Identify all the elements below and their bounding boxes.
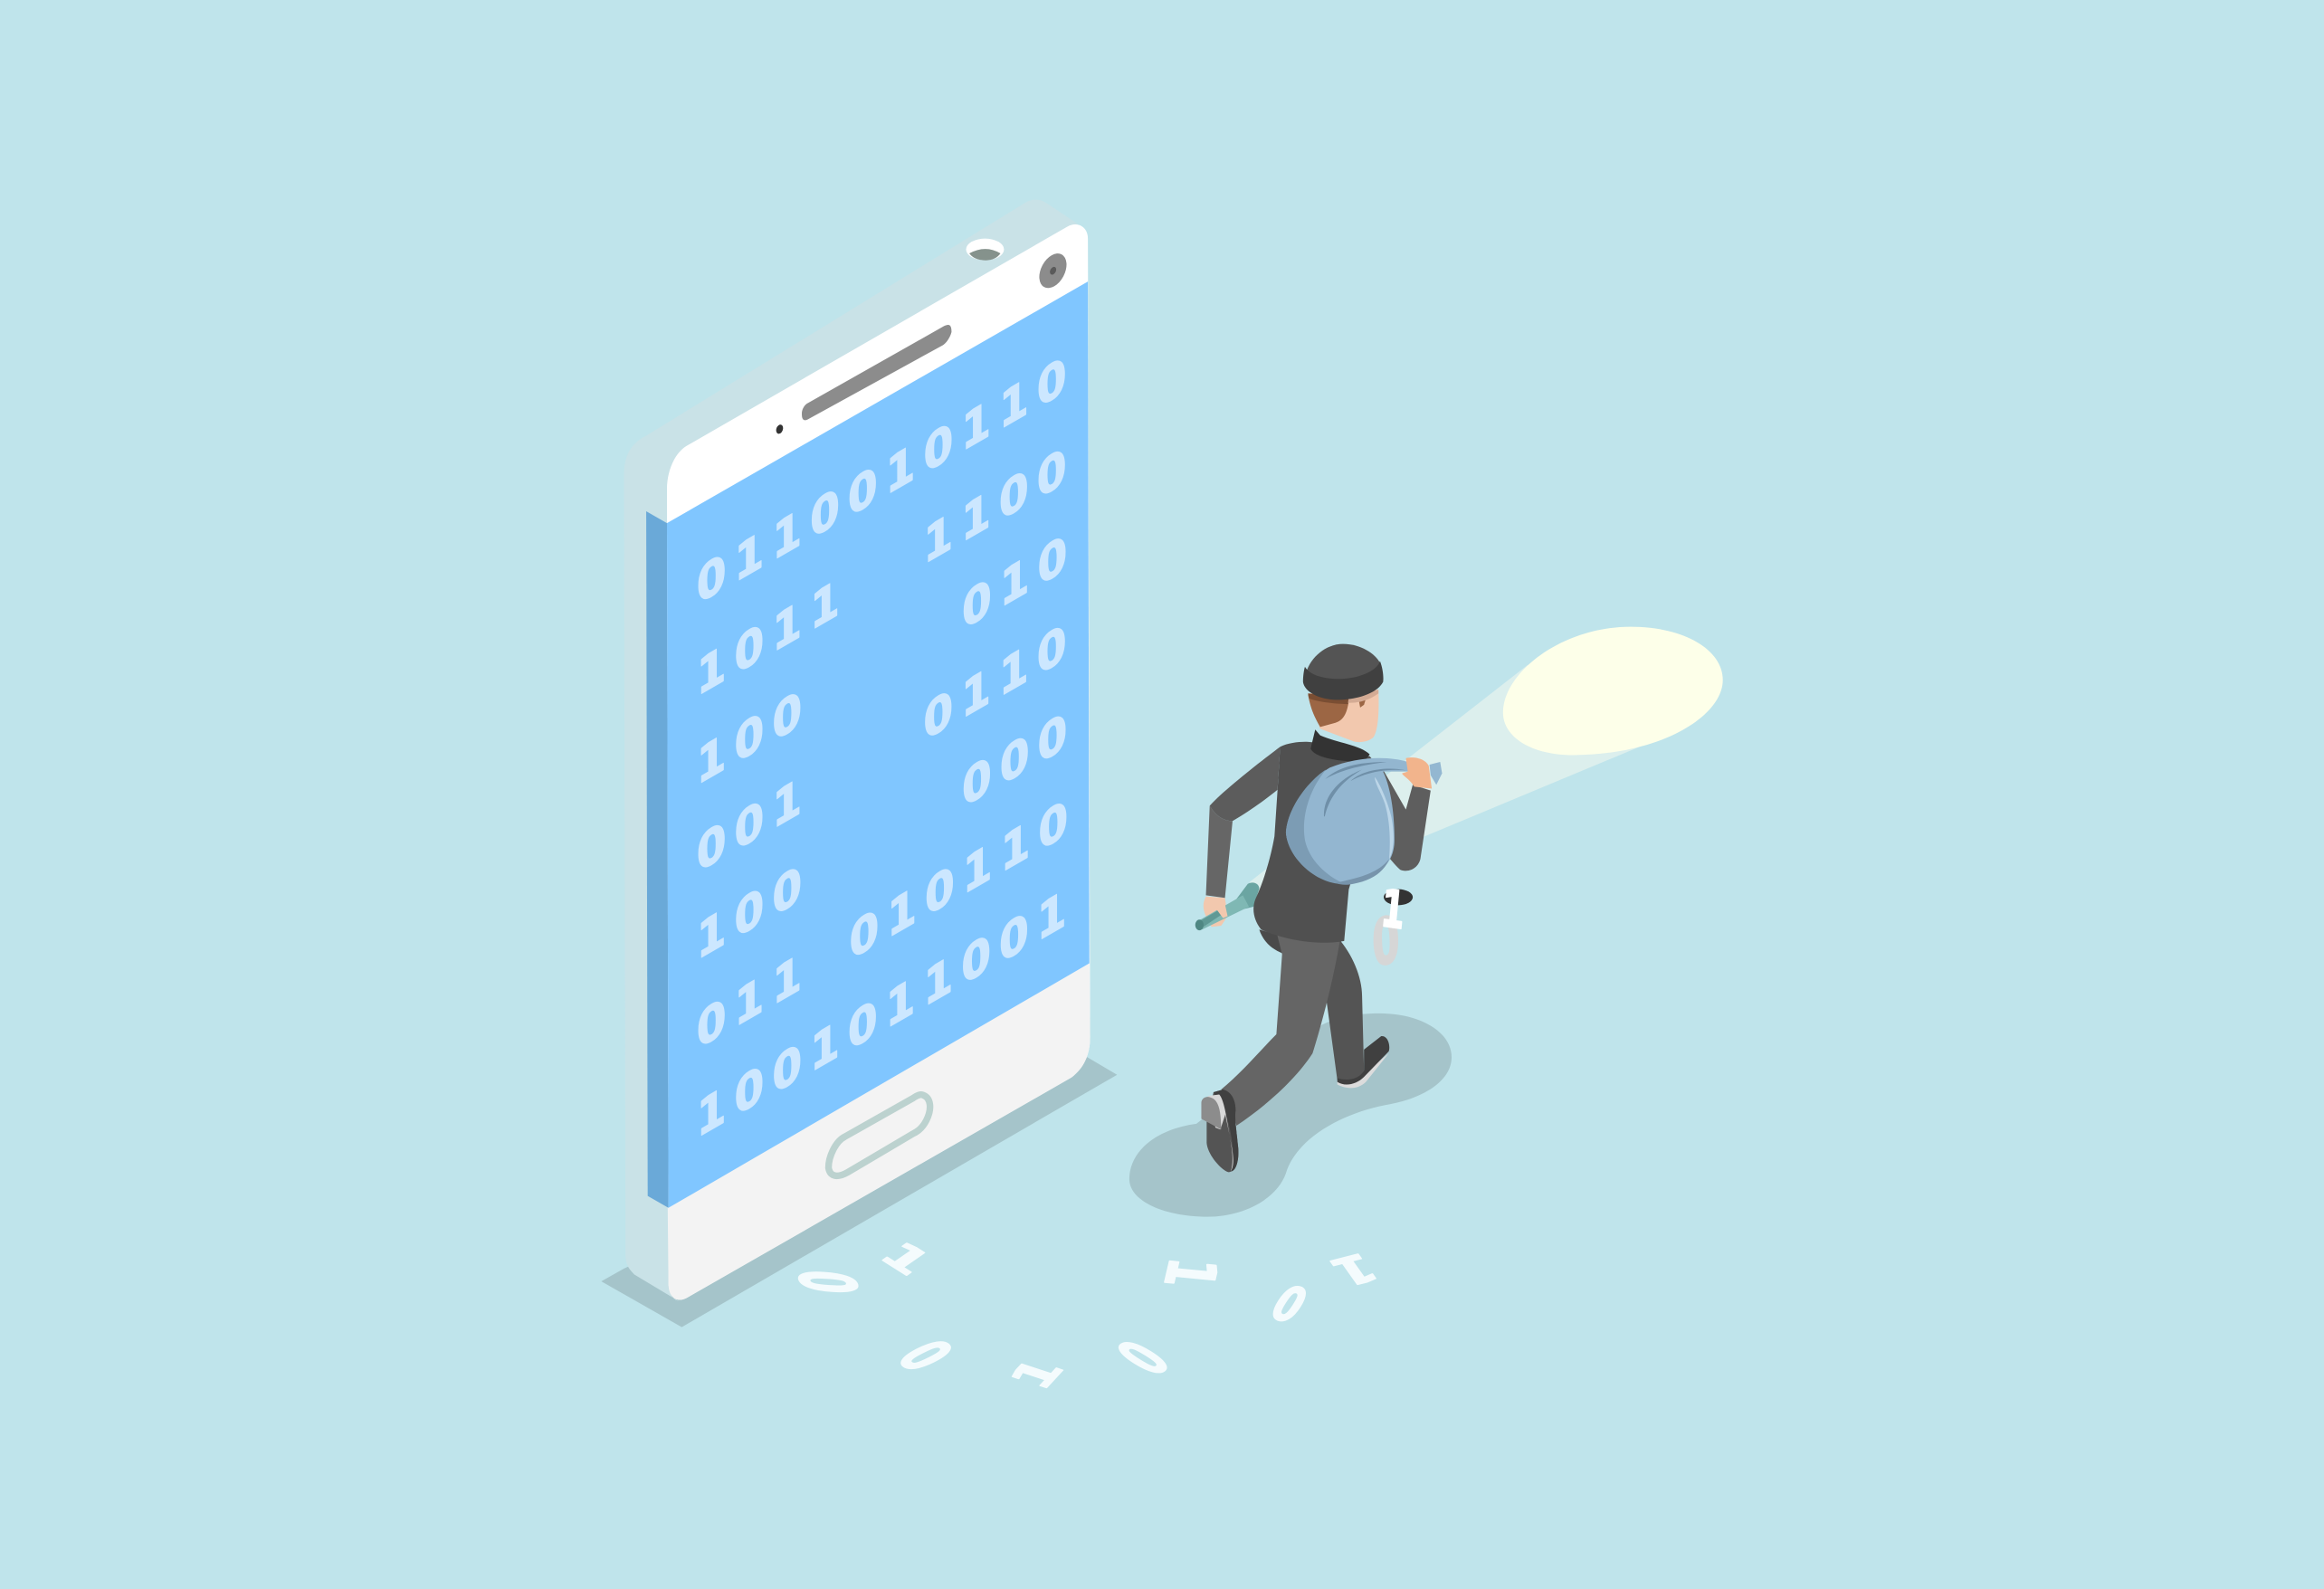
light spot bbox=[1503, 627, 1723, 755]
collar bbox=[1310, 729, 1370, 762]
falling digit 1: 1 bbox=[1378, 879, 1408, 941]
scattered binary digits on floor: 1 bbox=[869, 1234, 942, 1283]
binary code on screen: 000 bbox=[962, 697, 1075, 819]
hand fingers bbox=[1215, 904, 1228, 918]
falling digit 0: 0 bbox=[1371, 902, 1401, 981]
binary code on screen: 0110 bbox=[923, 608, 1075, 753]
binary code on screen: 011 bbox=[697, 938, 810, 1061]
beanie bbox=[1303, 644, 1384, 699]
top jack bbox=[966, 239, 1004, 261]
scattered binary digits on floor: 0 bbox=[881, 1331, 968, 1381]
left arm bbox=[1206, 747, 1281, 898]
hole bbox=[1384, 890, 1413, 905]
hole with falling digits bbox=[1371, 879, 1413, 981]
flashlight bbox=[1195, 882, 1259, 930]
right arm bbox=[1379, 769, 1431, 871]
speaker bbox=[802, 325, 951, 420]
smartphone bbox=[624, 200, 1091, 1301]
sensor dot bbox=[775, 423, 785, 434]
front camera bbox=[1033, 249, 1072, 292]
binary code on screen: 1100 bbox=[923, 432, 1075, 576]
left hand bbox=[1204, 897, 1228, 927]
scattered binary digits on floor: 1 bbox=[1321, 1244, 1387, 1295]
phone side body bbox=[624, 200, 1078, 1301]
binary code on screen: 0110010110 bbox=[697, 341, 1075, 616]
right hand bbox=[1402, 757, 1432, 789]
binary code on screen: 010110 bbox=[850, 784, 1076, 972]
binary code on screen: 010 bbox=[962, 519, 1075, 642]
neck and face bbox=[1309, 690, 1378, 742]
scattered binary digits on floor bbox=[777, 1234, 1387, 1395]
scattered binary digits on floor: 0 bbox=[1260, 1276, 1318, 1334]
scattered binary digits on floor: 1 bbox=[1148, 1255, 1232, 1291]
binary code on screen: 1011 bbox=[697, 564, 848, 708]
scattered binary digits on floor: 1 bbox=[997, 1353, 1077, 1395]
binary code on screen: 001 bbox=[697, 762, 810, 884]
binary code on screen: 100 bbox=[697, 850, 810, 972]
binary code on screen bbox=[697, 341, 1076, 1149]
phone front bezel bbox=[667, 224, 1091, 1299]
binary code on screen: 100 bbox=[697, 674, 810, 797]
scattered binary digits on floor: 0 bbox=[777, 1268, 873, 1296]
flashlight beam bbox=[1250, 665, 1653, 905]
screen inner edge bbox=[646, 511, 669, 1208]
thief with flashlight and sack bbox=[1129, 627, 1723, 1217]
sack bbox=[1286, 758, 1408, 885]
scattered binary digits on floor: 0 bbox=[1101, 1331, 1186, 1385]
phone floor shadow bbox=[601, 1057, 1117, 1327]
front shoe bbox=[1201, 1089, 1238, 1172]
hair bbox=[1308, 690, 1378, 727]
screen bbox=[667, 281, 1090, 1208]
thief shadow bbox=[1129, 1013, 1452, 1217]
lower bezel bbox=[668, 964, 1091, 1299]
sack knot tail bbox=[1430, 762, 1442, 785]
binary code on screen: 1001011001 bbox=[697, 874, 1075, 1149]
front leg bbox=[1221, 929, 1341, 1126]
back leg bbox=[1326, 937, 1389, 1088]
home button bbox=[829, 1095, 930, 1175]
torso bbox=[1253, 742, 1383, 943]
